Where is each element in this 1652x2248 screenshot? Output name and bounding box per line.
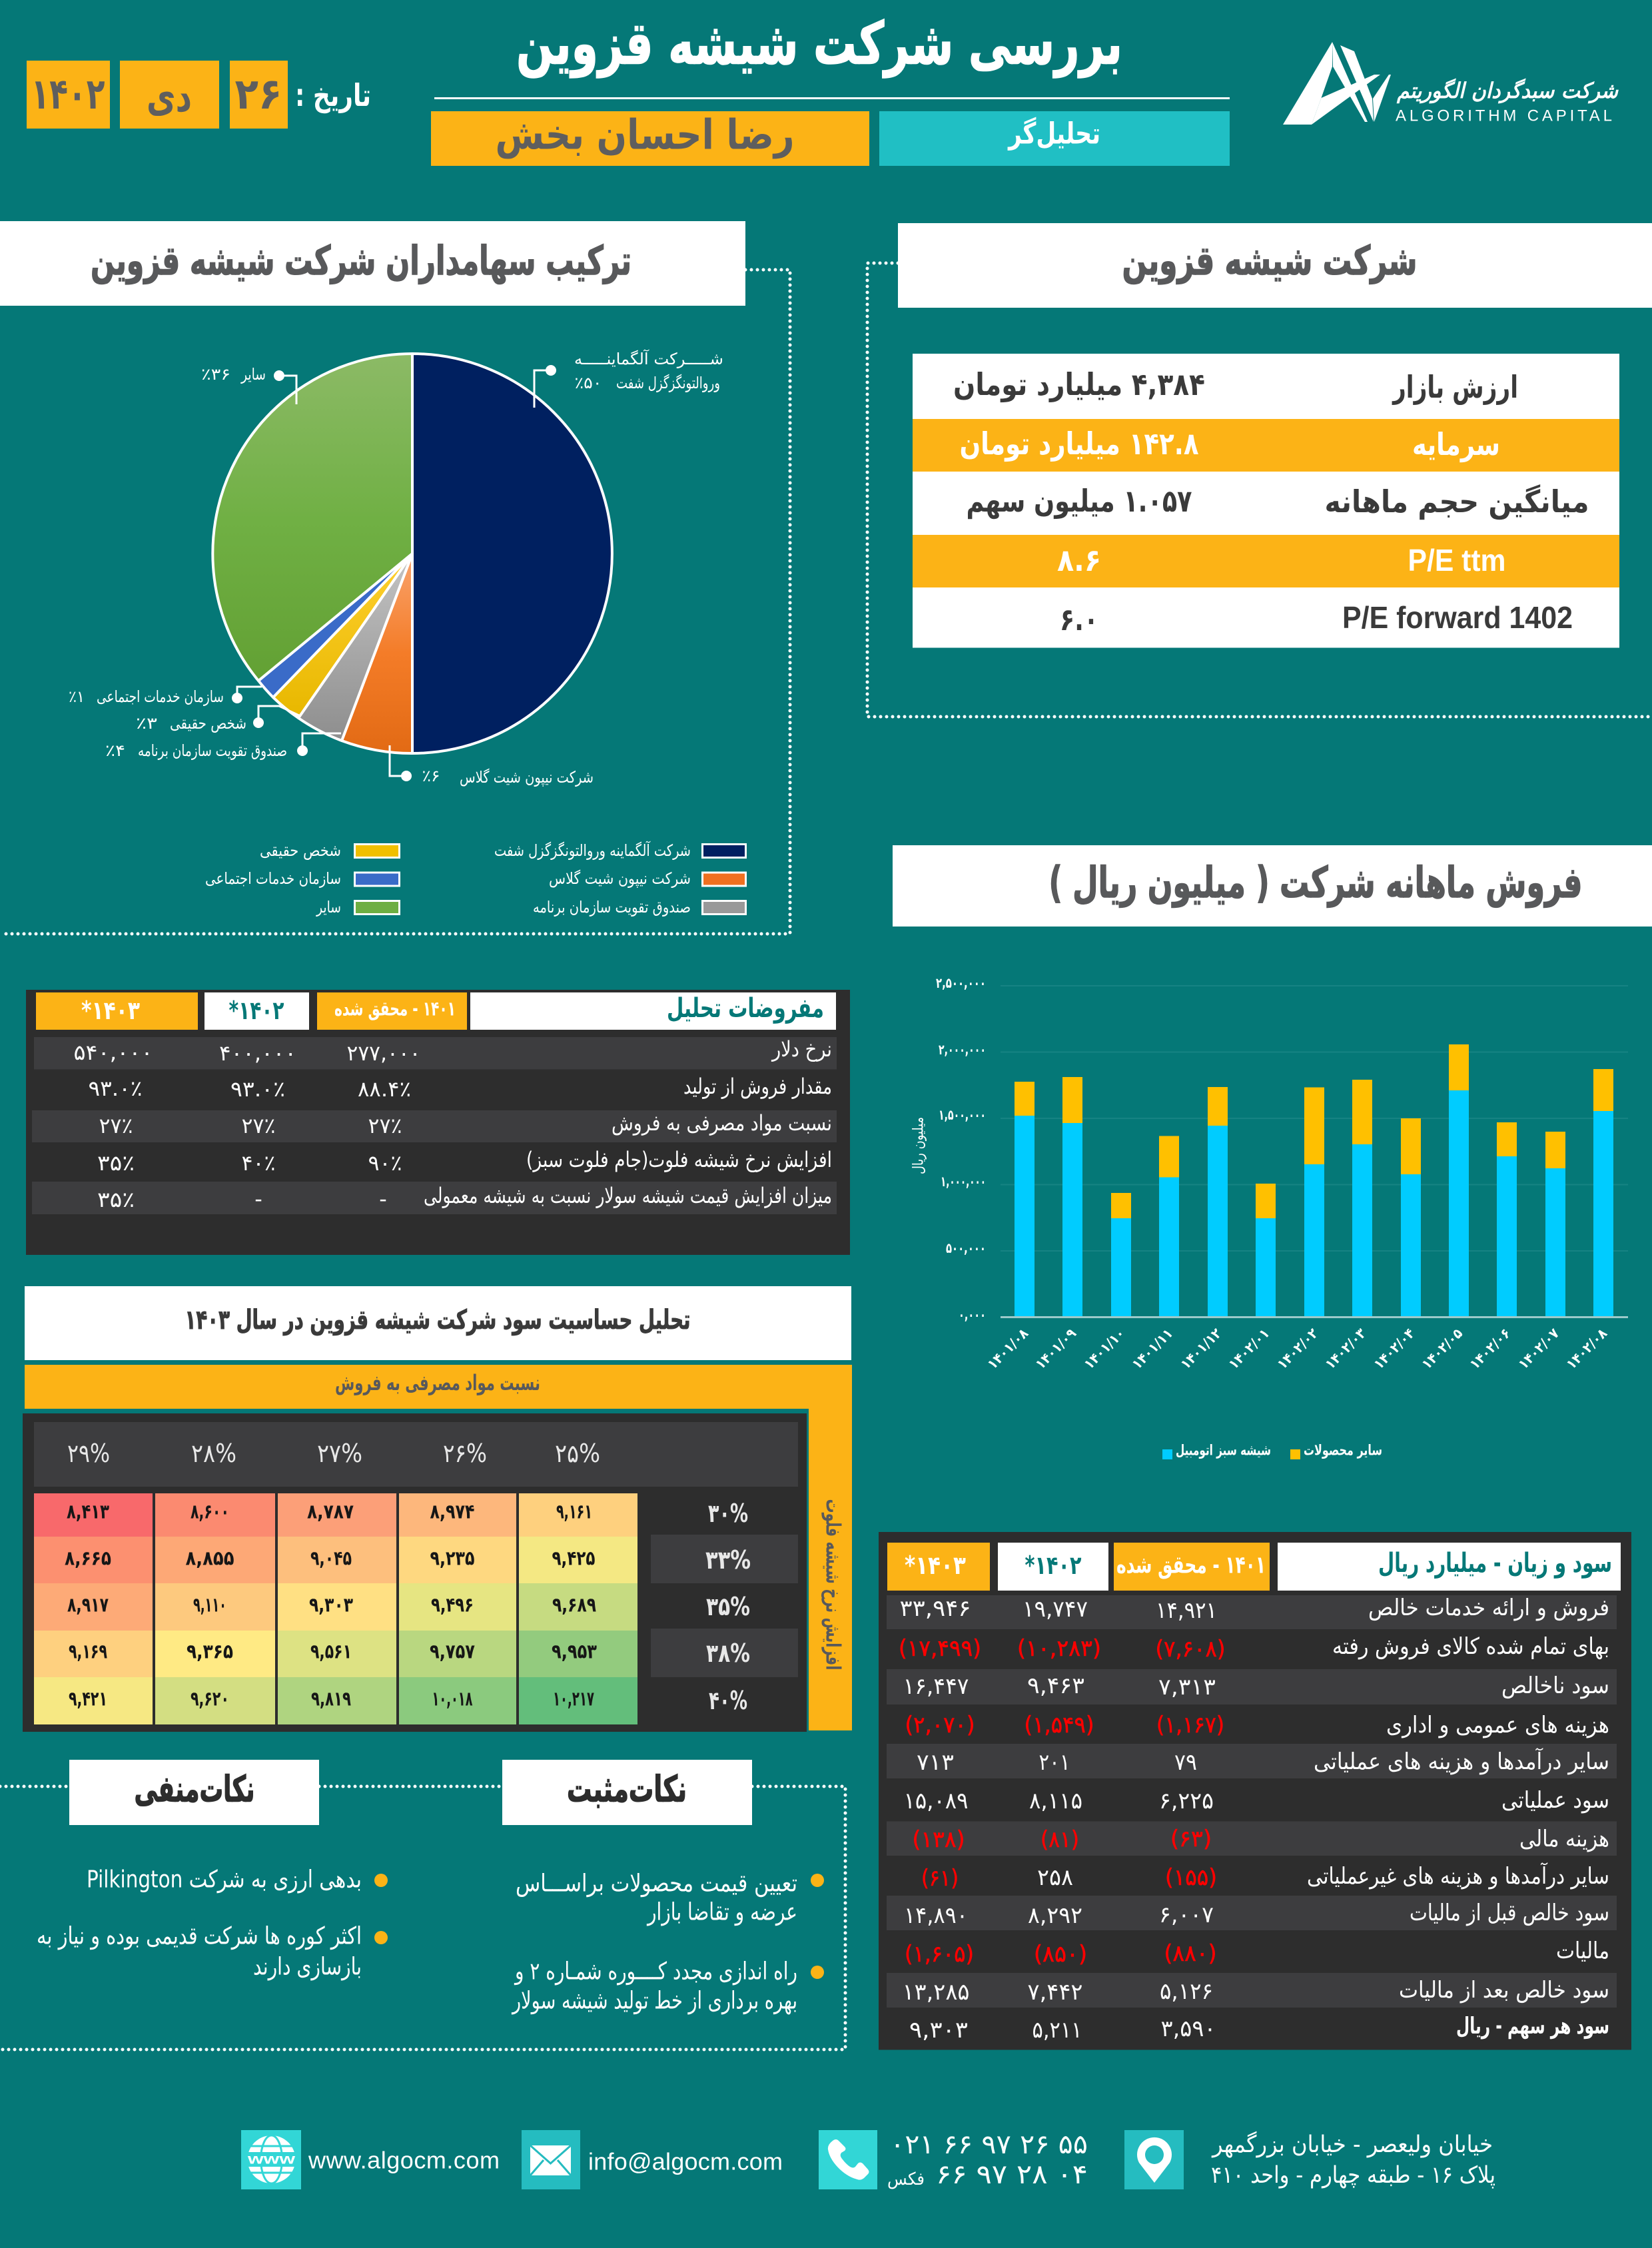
address: پلاک ۱۶ - طبقه چهارم - واحد ۴۱۰: [1211, 2162, 1495, 2189]
income statement rows: (۸۸۰): [1164, 1940, 1216, 1967]
callout: navy slice: شـــــرکت آلگماینـــــه: [574, 349, 723, 368]
heading: negative points: نکات‌منفی: [135, 1768, 254, 1810]
income statement rows: ۳۳,۹۴۶: [899, 1595, 971, 1622]
panel: positive points: [502, 1760, 824, 2014]
income statement rows: فروش و ارائه خدمات خالص: [1368, 1595, 1609, 1621]
income statement rows: ۶,۲۲۵: [1159, 1788, 1214, 1814]
table rows: ۲۷٪: [99, 1113, 133, 1138]
table header: [36, 992, 836, 1030]
header: [27, 9, 1619, 166]
table: company metrics: ۴,۳۸۴ میلیارد تومان: [953, 366, 1205, 402]
income statement rows: سود عملیاتی: [1501, 1787, 1609, 1814]
phone and fax numbers: ۶۶ ۹۷ ۲۸ ۰۴: [936, 2159, 1088, 2190]
callout: yellow slice: [136, 706, 300, 733]
income statement rows: ۱۴,۸۹۰: [904, 1902, 968, 1929]
table: company metrics: [913, 354, 1619, 647]
table: company metrics: سرمایه: [1412, 426, 1500, 462]
x axis labels: ۱۴۰۲/۰۵: [1419, 1325, 1465, 1372]
table rows: ۳۵٪: [97, 1187, 135, 1212]
icon: phone: [819, 2130, 877, 2189]
income statement rows: ۹,۳۰۳: [909, 2017, 968, 2044]
panel: company overview: [898, 223, 1652, 647]
income statement rows: ۲۵۸: [1037, 1864, 1073, 1891]
pie legend: شخص حقیقی: [260, 841, 341, 860]
chart legend: [1162, 1443, 1382, 1459]
table rows: ۳۵٪: [97, 1150, 135, 1176]
callout: green slice: [201, 365, 296, 404]
x axis labels: [985, 1325, 1610, 1372]
phone and fax numbers: ۰۲۱ ۶۶ ۹۷ ۲۶ ۵۵: [890, 2129, 1088, 2160]
income statement rows: (۱,۶۰۵): [905, 1941, 974, 1968]
y axis labels: ۵۰۰,۰۰۰: [946, 1240, 986, 1256]
analyst label: تحلیل‌گر: [1007, 116, 1100, 151]
callout: green slice: سایر: [240, 365, 266, 384]
heat values: ۹,۴۲۵: [552, 1547, 596, 1571]
logo: ALGORITHM CAPITAL: [1396, 107, 1612, 125]
income statement rows: (۷,۶۰۸): [1155, 1636, 1226, 1663]
income statement rows: ۶,۰۰۷: [1159, 1902, 1214, 1928]
bullet: pricing: عرضه و تقاضا بازار: [646, 1898, 797, 1926]
table: company metrics: P/E forward 1402: [1342, 600, 1573, 635]
income statement rows: (۶۱): [921, 1865, 959, 1892]
income statement rows: (۸۵۰): [1034, 1941, 1087, 1968]
analyst name: [431, 111, 869, 166]
x axis labels: ۱۴۰۱/۰۸: [985, 1325, 1031, 1372]
table: company metrics: ۱.۰۵۷ میلیون سهم: [966, 483, 1192, 519]
heading: company: شرکت شیشه قزوین: [1122, 238, 1418, 284]
income statement rows: ۹,۴۶۳: [1027, 1673, 1084, 1699]
bullet: FX debt: بدهی ارزی به شرکت Pilkington: [87, 1866, 362, 1893]
x axis labels: ۱۴۰۲/۰۱: [1226, 1325, 1272, 1372]
income statement rows: (۲,۰۷۰): [905, 1712, 975, 1738]
heading: sensitivity: تحلیل حساسیت سود شرکت شیشه قزوین در سال ۱۴۰۳: [185, 1305, 690, 1335]
heat values: ۹,۲۳۵: [430, 1547, 474, 1571]
bullet: old furnaces: بازسازی دارند: [253, 1953, 362, 1981]
heat values: ۸,۶۰۰: [191, 1500, 229, 1524]
callout: navy slice: [534, 349, 723, 408]
heading: positive points: نکات‌مثبت: [567, 1768, 687, 1810]
callout: grey slice: [105, 733, 341, 760]
income statement rows: سود خالص بعد از مالیات: [1399, 1977, 1609, 2004]
y axis labels: ۲,۵۰۰,۰۰۰: [936, 975, 986, 991]
heat values: ۸,۹۱۷: [67, 1593, 109, 1617]
table rows: [32, 1036, 837, 1214]
x axis labels: ۱۴۰۲/۰۴: [1371, 1325, 1418, 1372]
heat values: ۹,۴۹۶: [431, 1593, 474, 1617]
decorative dotted frames: [0, 263, 1652, 2050]
income statement rows: (۸۱): [1040, 1826, 1079, 1853]
heat values: ۹,۶۲۰: [191, 1688, 229, 1710]
y axis labels: ۰,۰۰۰: [959, 1307, 986, 1323]
pie chart: [212, 354, 612, 753]
table rows: ۲۷٪: [241, 1113, 276, 1138]
axis banner: material ratio: [25, 1365, 852, 1409]
bullet: old furnaces: اکثر کوره ها شرکت قدیمی بوده و نیاز به: [37, 1922, 362, 1950]
income statement rows: ۷۱۳: [917, 1749, 954, 1776]
panel: sensitivity analysis: [23, 1286, 852, 1732]
bullet: furnace restart: راه اندازی مجدد کــــوره شمـاره ۲ و: [514, 1958, 797, 1985]
heat values: ۸,۷۸۷: [307, 1500, 354, 1524]
heat values: ۹,۱۶۹: [69, 1640, 107, 1664]
heat values: ۹,۷۵۷: [430, 1640, 475, 1664]
income statement rows: ۱۳,۲۸۵: [902, 1979, 970, 2006]
income statement rows: [887, 1595, 1617, 2044]
row headers: [705, 1499, 751, 1715]
income statement rows: ۸,۱۱۵: [1029, 1788, 1082, 1814]
income statement rows: ۸,۲۹۲: [1028, 1902, 1082, 1929]
heat cells: [34, 1493, 637, 1724]
income statement rows: مالیات: [1556, 1938, 1609, 1964]
column headers: ۲۵%: [555, 1439, 600, 1468]
y axis labels: [936, 975, 986, 1323]
heat values: ۹,۳۰۳: [309, 1593, 353, 1617]
date: ۱۴۰۲: [31, 70, 105, 119]
x axis labels: ۱۴۰۱/۱۲: [1178, 1325, 1224, 1372]
pie legend: [205, 841, 746, 917]
heat values: ۹,۰۴۵: [310, 1547, 352, 1571]
table rows: ۹۳.۰٪: [88, 1076, 143, 1101]
income statement rows: (۶۳): [1170, 1826, 1212, 1852]
callout: orange slice: شرکت نیپون شیت گلاس: [460, 768, 594, 787]
income statement rows: ۵,۲۱۱: [1032, 2017, 1082, 2044]
heat values: ۸,۴۱۳: [67, 1500, 109, 1524]
table rows: ۹۰٪: [368, 1150, 402, 1176]
chart legend: سایر محصولات: [1304, 1443, 1382, 1459]
x axis labels: ۱۴۰۱/۱۱: [1129, 1325, 1176, 1372]
income statement rows: سود خالص قبل از مالیات: [1410, 1900, 1609, 1926]
heat values: ۹,۶۸۹: [552, 1593, 596, 1617]
y axis labels: ۱,۰۰۰,۰۰۰: [941, 1174, 986, 1190]
analyst label: [879, 111, 1230, 166]
yellow bars: [1015, 1044, 1613, 1218]
table rows: مقدار فروش از تولید: [683, 1074, 832, 1099]
bar chart: [910, 975, 1628, 1459]
date: دی: [147, 73, 192, 122]
table header: ۱۴۰۲*: [229, 996, 284, 1025]
axis banner: material ratio: نسبت مواد مصرفی به فروش: [335, 1370, 540, 1395]
panel: analysis assumptions: [26, 990, 850, 1255]
heat values: ۸,۶۶۵: [65, 1547, 111, 1571]
date: ۲۶: [234, 70, 282, 119]
logo: [1283, 42, 1619, 125]
table: company metrics: ۶.۰: [1060, 601, 1098, 637]
y axis title: میلیون ریال: [910, 1117, 927, 1174]
income statement rows: ۱۵,۰۸۹: [903, 1788, 969, 1814]
phone and fax numbers: [887, 2129, 1088, 2190]
heat values: ۹,۱۶۱: [556, 1500, 592, 1524]
analyst name: رضا احسان بخش: [496, 111, 794, 159]
table: company metrics: ۸.۶: [1057, 542, 1101, 578]
callout: navy slice: ٪۵۰: [574, 374, 602, 392]
x axis labels: ۱۴۰۱/۱۰: [1081, 1325, 1128, 1372]
axis banner: float price increase: افزایش نرخ شیشه فلوت: [821, 1499, 845, 1671]
date: [27, 61, 371, 129]
income statement rows: ۷,۴۴۲: [1027, 1979, 1083, 2006]
heat values: ۸,۸۵۵: [185, 1547, 234, 1571]
table rows: ۲۷٪: [368, 1113, 402, 1138]
table: company metrics: میانگین حجم ماهانه: [1324, 484, 1589, 520]
income statement rows: (۱۳۸): [913, 1826, 965, 1853]
panel: income statement: [879, 1532, 1631, 2050]
panel: negative points: [37, 1760, 388, 1981]
callout: yellow slice: ٪۳: [136, 714, 157, 733]
heat table: [23, 1413, 807, 1732]
column headers: ۲۷%: [317, 1439, 362, 1468]
table rows: ۹۳.۰٪: [230, 1076, 285, 1102]
table rows: ۵۴۰,۰۰۰: [73, 1040, 153, 1065]
panel: shareholders: [0, 221, 746, 917]
callout: green slice: ٪۳۶: [201, 365, 230, 384]
bullet: furnace restart: بهره برداری از خط تولید شیشه سولار: [511, 1988, 797, 2014]
axis banner: float price increase: [809, 1409, 852, 1730]
table rows: -: [254, 1186, 262, 1212]
x axis labels: ۱۴۰۲/۰۳: [1322, 1325, 1369, 1372]
callout: yellow slice: شخص حقیقی: [170, 714, 246, 733]
y axis labels: ۲,۰۰۰,۰۰۰: [939, 1042, 986, 1058]
panel: monthly sales: [893, 845, 1652, 1459]
x axis labels: ۱۴۰۲/۰۲: [1274, 1325, 1321, 1372]
row headers: ۳۸%: [706, 1639, 750, 1668]
income statement rows: ۵,۱۲۶: [1160, 1978, 1213, 2005]
x axis labels: ۱۴۰۱/۰۹: [1032, 1325, 1079, 1372]
income statement rows: ۱۹,۷۴۷: [1023, 1596, 1088, 1623]
chart legend: شیشه سبز اتومبیل: [1176, 1443, 1271, 1459]
phone and fax numbers: فکس: [887, 2169, 925, 2189]
table: company metrics: ۱۴۲.۸ میلیارد تومان: [959, 426, 1199, 462]
heat values: [65, 1500, 597, 1710]
callout: grey slice: ٪۴: [105, 741, 125, 760]
title underline: [434, 97, 1230, 99]
heat values: ۹,۵۶۱: [310, 1640, 352, 1664]
income statement rows: هزینه های عمومی و اداری: [1386, 1712, 1609, 1738]
website text: www.algocm.com: [308, 2146, 500, 2174]
table header: ۱۴۰۱ - محقق شده: [334, 998, 456, 1020]
table rows: نسبت مواد مصرفی به فروش: [612, 1110, 832, 1136]
callout: grey slice: صندوق تقویت سازمان برنامه: [138, 741, 287, 760]
table rows: -: [379, 1186, 387, 1212]
blue bars: [1015, 1090, 1613, 1317]
income statement rows: بهای تمام شده کالای فروش رفته: [1332, 1633, 1609, 1660]
heat values: ۱۰,۲۱۷: [553, 1688, 594, 1710]
pie legend: سازمان خدمات اجتماعی: [205, 869, 341, 888]
table rows: ۴۰۰,۰۰۰: [219, 1040, 296, 1066]
heat values: ۸,۹۷۴: [430, 1500, 474, 1524]
table: company metrics: ارزش بازار: [1392, 369, 1518, 405]
table header: مفروضات تحلیل: [667, 993, 824, 1024]
income statement rows: (۱,۵۴۹): [1025, 1712, 1094, 1738]
table: company metrics: P/E ttm: [1408, 543, 1505, 577]
income statement rows: سود ناخالص: [1501, 1673, 1609, 1699]
heat values: ۹,۳۶۵: [187, 1640, 233, 1664]
x axis labels: ۱۴۰۲/۰۷: [1515, 1325, 1562, 1372]
date: تاریخ :: [295, 77, 371, 113]
row headers: ۳۵%: [706, 1592, 750, 1621]
footer contact strip: [0, 2125, 1495, 2190]
income statement rows: ۱۶,۴۴۷: [903, 1673, 969, 1700]
table rows: نرخ دلار: [771, 1036, 832, 1062]
table rows: افزایش نرخ شیشه فلوت(جام فلوت سبز): [526, 1147, 832, 1172]
y axis labels: ۱,۵۰۰,۰۰۰: [939, 1107, 986, 1123]
icon: website globe: www: [247, 2151, 296, 2167]
income statement rows: سایر درآمدها و هزینه های غیرعملیاتی: [1307, 1862, 1609, 1890]
heat values: ۹,۸۱۹: [311, 1688, 351, 1710]
title: بررسی شرکت شیشه قزوین: [516, 9, 1122, 79]
column headers: ۲۸%: [191, 1439, 236, 1468]
income statement header: ۱۴۰۲*: [1025, 1551, 1082, 1580]
x axis labels: ۱۴۰۲/۰۶: [1467, 1325, 1513, 1372]
income statement rows: ۷۹: [1174, 1749, 1197, 1776]
callout: blue slice: سازمان خدمات اجتماعی: [97, 687, 224, 706]
table rows: ۴۰٪: [241, 1150, 276, 1176]
bullet: pricing: تعیین قیمت محصولات براســـاس: [516, 1870, 797, 1897]
heat values: ۹,۱۱۰: [193, 1593, 226, 1617]
x axis labels: ۱۴۰۲/۰۸: [1563, 1325, 1610, 1372]
income statement rows: (۱۰,۲۸۳): [1017, 1635, 1101, 1662]
table rows: ۲۷۷,۰۰۰: [346, 1040, 421, 1066]
pie legend: شرکت نیپون شیت گلاس: [549, 869, 691, 888]
table rows: ۸۸.۴٪: [358, 1076, 411, 1102]
income statement rows: (۱۷,۴۹۹): [899, 1635, 981, 1662]
column headers: ۲۶%: [443, 1439, 487, 1468]
logo: شرکت سبدگردان الگوریتم: [1396, 78, 1619, 104]
row headers: ۴۰%: [709, 1686, 747, 1715]
heat values: ۱۰,۰۱۸: [432, 1688, 473, 1710]
row headers: ۳۳%: [705, 1545, 751, 1575]
bullet: furnace restart: [511, 1958, 824, 2014]
heading: shareholders: ترکیب سهامداران شرکت شیشه قزوین: [91, 238, 631, 284]
bullet: old furnaces: [37, 1922, 388, 1981]
callout: orange slice: ٪۶: [422, 767, 440, 785]
callout: navy slice: وروالتونگزگزل شفت: [616, 374, 720, 392]
income statement rows: ۳,۵۹۰: [1160, 2016, 1216, 2042]
callout: blue slice: ٪۱: [69, 687, 85, 706]
address: خیابان ولیعصر - خیابان بزرگمهر: [1211, 2131, 1493, 2158]
heat values: ۹,۴۲۱: [69, 1688, 107, 1710]
address: [1211, 2131, 1495, 2189]
income statement rows: سایر درآمدها و هزینه های عملیاتی: [1314, 1748, 1609, 1775]
icon: website globe: [241, 2130, 301, 2189]
column headers: [67, 1439, 600, 1468]
pie legend: شرکت آلگماینه وروالتونگزگزل شفت: [494, 841, 691, 860]
pie legend: صندوق تقویت سازمان برنامه: [533, 898, 691, 917]
income statement header: [887, 1543, 1621, 1591]
table rows: میزان افزایش قیمت شیشه سولار نسبت به شیشه معمولی: [424, 1183, 832, 1208]
income statement rows: ۷,۳۱۳: [1158, 1674, 1216, 1700]
income statement rows: (۱۵۵): [1165, 1864, 1217, 1891]
callout: orange slice: [390, 745, 594, 787]
icon: mail: [522, 2130, 580, 2189]
income statement header: ۱۴۰۳*: [905, 1551, 966, 1580]
income statement rows: ۲۰۱: [1039, 1749, 1070, 1776]
row headers: ۳۰%: [708, 1499, 748, 1528]
income statement header: ۱۴۰۱ - محقق شده: [1116, 1552, 1266, 1579]
bullet: pricing: [516, 1870, 824, 1926]
icon: location pin: [1124, 2130, 1184, 2189]
income statement rows: ۱۴,۹۲۱: [1156, 1597, 1217, 1624]
column headers: ۲۹%: [67, 1439, 110, 1468]
income statement rows: (۱,۱۶۷): [1156, 1712, 1224, 1738]
pie legend: سایر: [316, 898, 341, 917]
heat values: ۹,۹۵۳: [552, 1640, 597, 1664]
email text: info@algocm.com: [588, 2147, 783, 2175]
table header: ۱۴۰۳*: [81, 996, 140, 1025]
income statement rows: هزینه مالی: [1519, 1826, 1609, 1852]
